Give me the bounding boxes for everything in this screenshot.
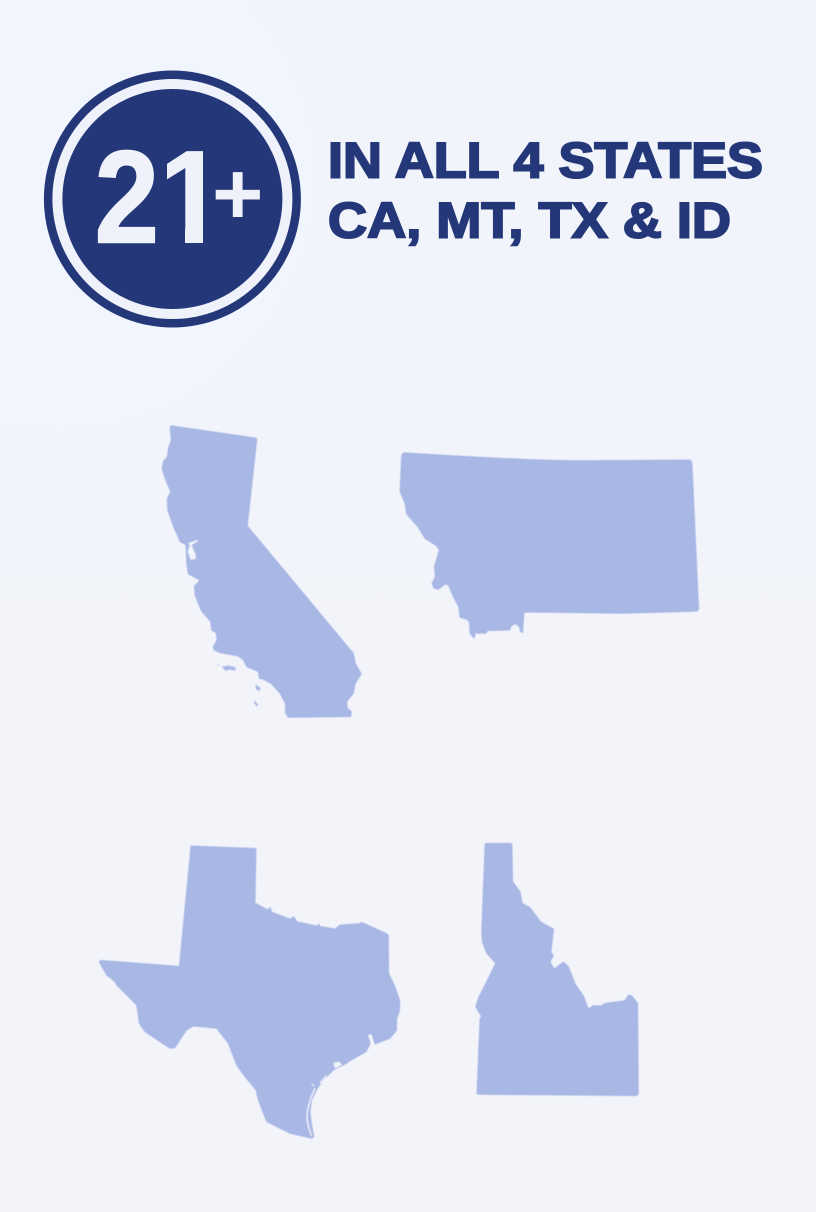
Channel Islands xyxy=(217,664,261,706)
San Francisco Bay xyxy=(188,540,198,560)
badge digit 1: 1 xyxy=(155,124,228,270)
badge plus sign: + xyxy=(212,144,263,243)
badge: 21+ xyxy=(44,70,301,328)
map: California xyxy=(162,426,361,717)
heading line 1: IN ALL 4 STATES xyxy=(328,133,763,189)
badge digit 2: 2 xyxy=(94,124,159,271)
Texas bay xyxy=(333,1062,342,1068)
heading xyxy=(328,133,763,249)
map: Montana xyxy=(400,453,699,638)
map: Idaho xyxy=(476,843,638,1096)
heading line 2: CA, MT, TX & ID xyxy=(328,193,731,249)
map: Texas xyxy=(99,846,400,1138)
Texas coastal lagoon xyxy=(307,1076,327,1136)
